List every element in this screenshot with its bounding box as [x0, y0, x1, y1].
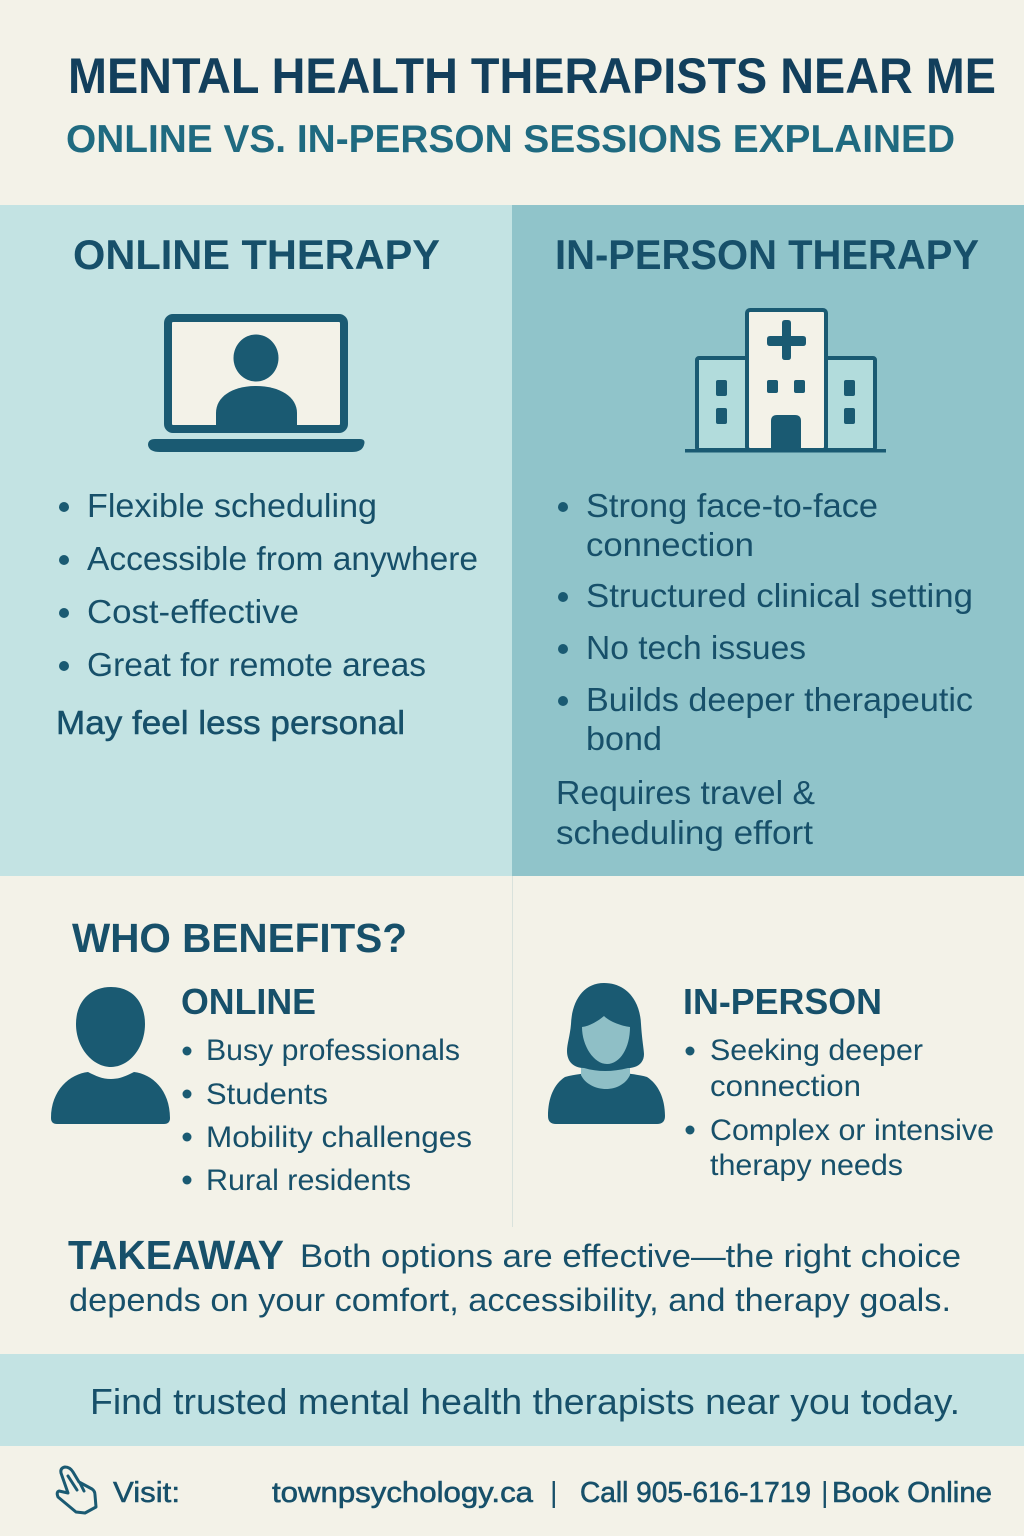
online benefits list: Cost-effective: [87, 594, 299, 631]
takeaway: depends on your comfort, accessibility, and therapy goals.: [69, 1282, 951, 1318]
takeaway: TAKEAWAY: [68, 1232, 284, 1278]
heading: who benefits: WHO BENEFITS?: [72, 915, 407, 961]
subheading: online: ONLINE: [181, 981, 316, 1022]
contact bar: townpsychology.ca: [272, 1477, 534, 1509]
heading: in-person therapy: IN-PERSON THERAPY: [555, 231, 979, 278]
online drawback: May feel less personal: [56, 705, 405, 742]
subtitle: ONLINE VS. IN-PERSON SESSIONS EXPLAINED: [66, 118, 955, 161]
icon: pointing hand: [57, 1467, 96, 1513]
online beneficiaries: Mobility challenges: [206, 1121, 472, 1154]
in-person benefits list: Builds deeper therapeutic: [586, 682, 973, 719]
call to action banner: [0, 1354, 1024, 1446]
online benefits list: Great for remote areas: [87, 647, 426, 684]
title: [66, 48, 996, 161]
online benefits list: Accessible from anywhere: [87, 541, 478, 578]
icon: person online: [51, 987, 170, 1124]
online beneficiaries: Rural residents: [206, 1164, 411, 1197]
online benefits list: Flexible scheduling: [87, 488, 377, 525]
online beneficiaries: Students: [206, 1078, 328, 1111]
in-person benefits list: Strong face-to-face: [586, 488, 878, 525]
in-person beneficiaries: therapy needs: [710, 1149, 903, 1182]
in-person benefits list: connection: [586, 527, 754, 564]
heading: online therapy: ONLINE THERAPY: [73, 231, 440, 278]
call to action banner: Find trusted mental health therapists near you today.: [90, 1381, 960, 1422]
panel: online therapy: [0, 205, 512, 876]
contact bar: Book Online: [832, 1477, 992, 1509]
in-person benefits list: bond: [586, 721, 662, 758]
panel: in-person therapy: [512, 205, 1024, 876]
in-person benefits list: [558, 488, 973, 758]
in-person beneficiaries: Seeking deeper: [710, 1034, 923, 1067]
in-person beneficiaries: Complex or intensive: [710, 1114, 994, 1147]
takeaway: Both options are effective—the right choice: [300, 1238, 961, 1274]
subheading: in-person: IN-PERSON: [683, 981, 882, 1022]
contact bar: Call 905-616-1719: [580, 1477, 811, 1509]
in-person drawback: Requires travel &: [556, 775, 815, 812]
contact bar: [113, 1477, 992, 1509]
in-person benefits list: No tech issues: [586, 630, 806, 667]
contact bar: |: [821, 1477, 829, 1509]
icon: laptop with person: [148, 318, 364, 452]
contact bar: Visit:: [113, 1477, 180, 1509]
in-person drawback: scheduling effort: [556, 815, 814, 852]
online benefits list: [59, 488, 478, 684]
in-person beneficiaries: [683, 981, 994, 1182]
in-person beneficiaries: connection: [710, 1070, 861, 1103]
in-person benefits list: Structured clinical setting: [586, 578, 973, 615]
icon: clinic building: [685, 310, 886, 452]
online beneficiaries: Busy professionals: [206, 1034, 460, 1067]
contact bar: |: [550, 1477, 558, 1509]
icon: person in-person: [548, 983, 665, 1124]
online beneficiaries: [181, 981, 472, 1197]
takeaway: [68, 1232, 961, 1318]
